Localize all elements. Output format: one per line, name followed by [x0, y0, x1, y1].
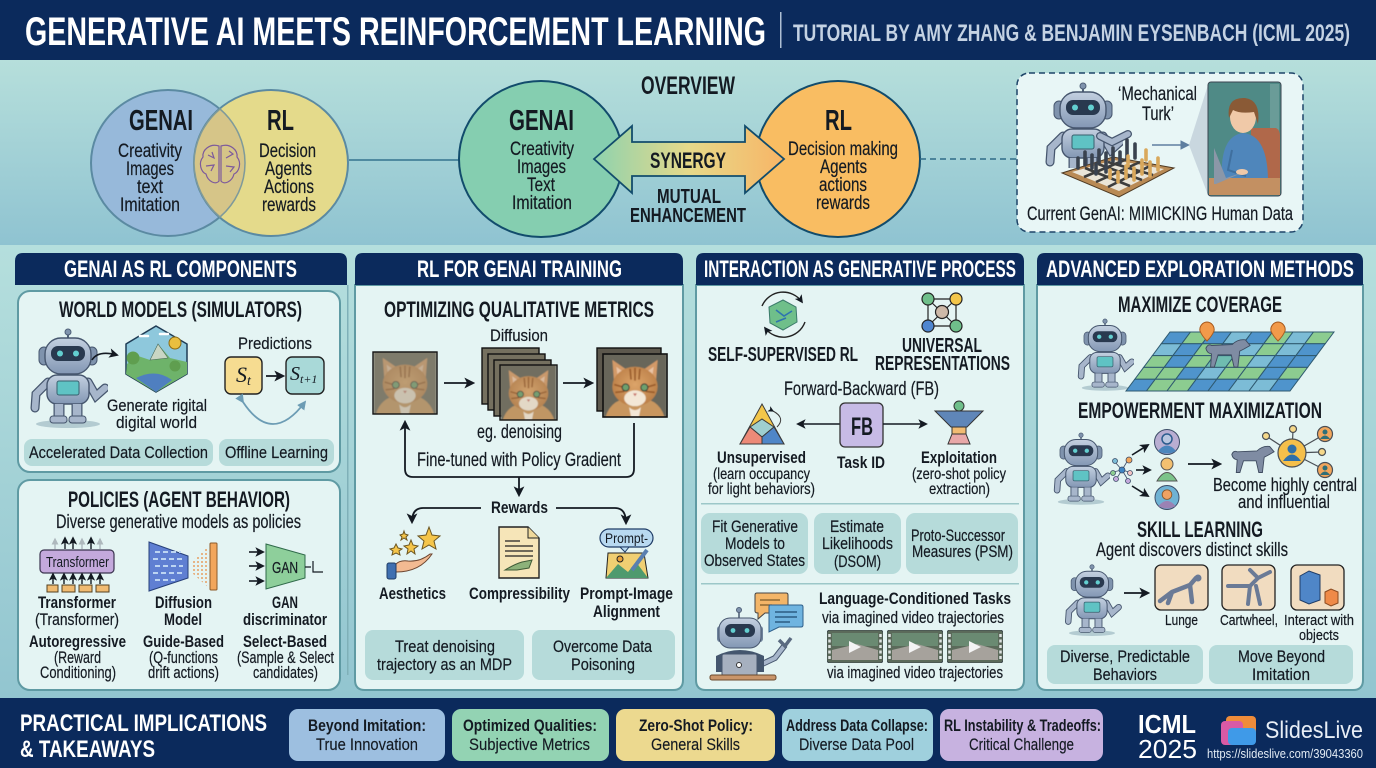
takeaway: optimized qualities: Subjective Metrics	[469, 735, 590, 754]
arrow: noisy to denoising	[444, 382, 473, 384]
icon: diffusion model	[149, 542, 217, 591]
world caption	[107, 396, 207, 432]
label: lunge: Lunge	[1165, 612, 1198, 629]
pill: proto-successor measures	[906, 513, 1018, 574]
icon: person bottom	[1155, 485, 1179, 510]
label: interact with objects	[1284, 612, 1354, 644]
arrow: robot to world	[92, 353, 117, 360]
coverage grid	[1126, 332, 1334, 391]
circle: GenAI: Imitation	[512, 193, 572, 214]
venn diagram: GenAI and RL overlap	[91, 90, 348, 236]
icon: self-supervised cycle	[762, 292, 805, 337]
pill: offline learning: Offline Learning	[225, 443, 328, 462]
denoising label: eg. denoising	[477, 422, 562, 443]
icon: person top	[1154, 430, 1180, 454]
icon: robot playing chess	[1050, 83, 1174, 197]
arrow: denoising to clean	[563, 382, 592, 384]
pill: estimate likelihoods	[814, 513, 901, 574]
label: aesthetics: Aesthetics	[379, 584, 446, 603]
column: diffusion text: Guide-Based	[143, 632, 224, 651]
state box: S_t: t	[247, 374, 252, 389]
arrow: to rewards	[518, 477, 520, 495]
connector: dashed line to callout	[920, 158, 1017, 160]
icon: GAN	[249, 544, 323, 589]
label: cartwheel: Cartwheel,	[1220, 612, 1278, 629]
icon: location pin left	[1200, 322, 1214, 341]
icon: person at laptop	[1208, 82, 1281, 196]
panel heading: INTERACTION AS GENERATIVE PROCESS	[704, 256, 1016, 283]
icon: running robot	[1068, 565, 1119, 636]
arrow: policy gradient feedback	[405, 422, 634, 477]
takeaway: RL instability: RL Instability & Tradeoffs:	[944, 716, 1101, 735]
panel: RL for GenAI training	[355, 253, 683, 690]
policy gradient label: Fine-tuned with Policy Gradient	[417, 450, 622, 471]
column: diffusion text: (Q-functions	[149, 648, 218, 667]
mechanical turk label: ‘Mechanical	[1118, 84, 1197, 105]
RL traits: Agents	[265, 159, 312, 180]
circle: GenAI	[459, 81, 623, 237]
label: forward-backward: Forward-Backward (FB)	[784, 379, 939, 400]
panel: advanced exploration methods	[1037, 253, 1363, 690]
GenAI traits: Creativity	[118, 141, 182, 162]
state box: S_t+1: S	[290, 363, 300, 385]
icon: SlidesLive logo	[1221, 716, 1256, 745]
takeaway: optimized qualities	[452, 709, 609, 761]
arrow: state transition	[266, 375, 283, 377]
arrow: rewards to aesthetics	[412, 508, 481, 522]
ICML 2025 logo text	[1138, 709, 1197, 764]
pill: treat denoising as MDP: trajectory as an MDP	[377, 655, 512, 674]
predictions label: Predictions	[238, 334, 312, 353]
label: prompt-image alignment: Prompt-Image	[580, 584, 673, 603]
label: universal representations	[875, 335, 1010, 375]
main content background	[0, 245, 1376, 700]
pill: fit generative models: Observed States	[704, 551, 805, 570]
column: diffusion text	[143, 593, 224, 682]
ICML 2025 logo text: ICML	[1138, 709, 1196, 739]
card: policies	[18, 480, 340, 690]
label: exploitation: Exploitation	[921, 448, 997, 467]
column: transformer text: Transformer	[38, 593, 116, 612]
icon: robot	[1081, 319, 1132, 391]
overview heading: OVERVIEW	[641, 72, 735, 100]
icon: hexagon world	[126, 326, 187, 392]
icon: location pin right	[1271, 322, 1285, 341]
footer heading: & TAKEAWAYS	[20, 736, 155, 763]
rewards label: Rewards	[491, 498, 548, 517]
takeaway: beyond imitation: True Innovation	[316, 735, 418, 754]
column: GAN text	[237, 593, 334, 682]
label: self-supervised RL: SELF-SUPERVISED RL	[708, 344, 858, 366]
panel heading: RL FOR GENAI TRAINING	[417, 256, 622, 283]
column: diffusion text: Diffusion	[155, 593, 212, 612]
image: noisy cat	[373, 352, 437, 414]
card subheading: Diverse generative models as policies	[56, 512, 301, 533]
takeaway: beyond imitation	[289, 709, 445, 761]
state box: S_t: S	[236, 362, 247, 387]
icon: cartwheel skill	[1222, 565, 1275, 610]
label: interact with objects: Interact with	[1284, 612, 1354, 629]
RL traits: Decision	[259, 141, 316, 162]
pill: accelerated data collection: Accelerated Data Collection	[29, 443, 208, 462]
label: central and influential	[1213, 475, 1357, 512]
pill: estimate likelihoods: Likelihoods	[822, 534, 893, 553]
GenAI traits: text	[137, 177, 164, 198]
section heading: maximize coverage: MAXIMIZE COVERAGE	[1118, 292, 1282, 317]
icon: robot dog	[1232, 446, 1274, 472]
circle: RL: Decision making	[788, 139, 898, 160]
RL traits	[259, 141, 316, 216]
circle: GenAI: Text	[527, 175, 556, 196]
section heading: skill learning: SKILL LEARNING	[1137, 517, 1263, 542]
circle: GenAI: Images	[517, 157, 566, 178]
video caption: via imagined video trajectories	[827, 663, 1003, 682]
pill: overcome data poisoning	[532, 630, 675, 680]
pill: treat denoising as MDP	[365, 630, 524, 680]
icon: robot	[35, 329, 105, 428]
column: transformer text: Conditioning)	[40, 663, 116, 682]
takeaway: RL instability: Critical Challenge	[969, 735, 1074, 754]
takeaway: beyond imitation: Beyond Imitation:	[308, 716, 426, 735]
card heading: WORLD MODELS (SIMULATORS)	[59, 297, 302, 322]
world caption: Generate rigital	[107, 396, 207, 415]
icon: prompt and picture	[600, 529, 653, 578]
icon: robot dog	[1206, 340, 1250, 367]
takeaway: zero-shot policy	[616, 709, 775, 761]
header bar	[0, 0, 1376, 60]
image stack: denoising	[482, 348, 557, 420]
takeaway: RL instability	[940, 709, 1103, 761]
label: unsupervised	[708, 448, 815, 498]
icon: interact with objects	[1291, 565, 1344, 610]
takeaway: address data collapse: Diverse Data Pool	[799, 735, 914, 754]
icon: robot with laptop and chat bubbles	[710, 593, 803, 680]
light cone	[1189, 85, 1208, 195]
state box: S_t+1: t+1	[300, 372, 317, 386]
label: prompt-image alignment	[580, 584, 673, 621]
icon: prompt and picture: Prompt-	[605, 530, 648, 546]
state box: S_t+1	[286, 357, 324, 394]
panel heading	[15, 253, 347, 285]
panel heading	[355, 253, 683, 285]
arrow: FB to exploitation	[883, 423, 926, 425]
RL traits: rewards	[262, 195, 316, 216]
GenAI traits	[118, 141, 182, 216]
takeaway: zero-shot policy: General Skills	[651, 735, 740, 754]
label: exploitation: extraction)	[929, 481, 990, 498]
mutual enhancement label	[630, 186, 746, 227]
pill: estimate likelihoods: Estimate	[830, 517, 884, 536]
footer heading: PRACTICAL IMPLICATIONS	[20, 710, 267, 737]
takeaway: address data collapse: Address Data Collapse:	[786, 716, 928, 735]
pill: offline learning	[219, 439, 334, 466]
arrow: robot to human	[1152, 144, 1188, 146]
label: universal representations: REPRESENTATIONS	[875, 353, 1010, 375]
section heading: OPTIMIZING QUALITATIVE METRICS	[384, 297, 654, 322]
label: unsupervised: (learn occupancy	[713, 466, 810, 483]
pill: fit generative models	[701, 513, 808, 574]
overview background band	[0, 60, 1376, 245]
icon: central hub network	[1262, 426, 1332, 478]
ICML 2025 logo text: 2025	[1138, 734, 1197, 764]
pill: accelerated data collection	[24, 439, 213, 466]
arrow: FB to unsupervised	[798, 423, 840, 425]
pill: diverse predictable behaviors	[1047, 645, 1203, 684]
image: clean cat	[597, 348, 667, 417]
SlidesLive wordmark: SlidesLive	[1265, 717, 1363, 744]
pill: fit generative models: Models to	[725, 534, 785, 553]
icon: action network	[1110, 457, 1132, 484]
column: GAN text: candidates)	[253, 663, 318, 682]
takeaway: zero-shot policy: Zero-Shot Policy:	[639, 716, 753, 735]
panel heading	[696, 253, 1024, 285]
column: GAN text: discriminator	[243, 610, 327, 629]
footer heading	[20, 710, 267, 763]
circle: RL: actions	[819, 175, 867, 196]
column: diffusion text: Model	[164, 610, 202, 629]
column: GAN text: GAN	[272, 593, 298, 612]
icon: robot	[1057, 433, 1108, 505]
panel heading: GENAI AS RL COMPONENTS	[64, 256, 297, 283]
icon: triangle occupancy	[740, 404, 784, 444]
mutual enhancement label: ENHANCEMENT	[630, 205, 746, 227]
panel: GenAI as RL components	[15, 253, 348, 690]
column: GAN text: Select-Based	[243, 632, 327, 651]
box: FB: FB	[851, 413, 873, 441]
label: unsupervised: Unsupervised	[717, 448, 806, 467]
mutual enhancement label: MUTUAL	[657, 186, 721, 208]
column: transformer text: Autoregressive	[29, 632, 126, 651]
panel: interaction as generative process	[696, 253, 1024, 690]
pill: treat denoising as MDP: Treat denoising	[395, 637, 495, 656]
card heading: POLICIES (AGENT BEHAVIOR)	[68, 487, 290, 512]
pill: proto-successor measures: Proto-Successor	[911, 526, 1005, 545]
icon: document	[499, 527, 539, 578]
arrow: to skills	[1124, 592, 1148, 594]
arrow: rewards to alignment	[556, 508, 626, 523]
caption: Current GenAI: MIMICKING Human Data	[1027, 204, 1293, 225]
takeaway: optimized qualities: Optimized Qualities:	[463, 716, 597, 735]
venn label: GenAI: GENAI	[129, 105, 193, 137]
card: world models	[18, 291, 340, 472]
connector: venn to synergy	[349, 159, 461, 161]
label: exploitation	[912, 448, 1006, 498]
label: task ID: Task ID	[837, 453, 885, 472]
label: universal representations: UNIVERSAL	[902, 335, 982, 357]
pill: diverse predictable behaviors: Behaviors	[1093, 665, 1157, 684]
GenAI traits: Imitation	[120, 195, 180, 216]
icon: person middle	[1157, 458, 1177, 481]
icon: brain	[200, 145, 240, 183]
takeaway: address data collapse	[782, 709, 933, 761]
mechanical turk label	[1118, 84, 1197, 125]
title: GENERATIVE AI MEETS REINFORCEMENT LEARNING	[25, 10, 766, 54]
RL traits: Actions	[264, 177, 314, 198]
pill: move beyond imitation: Imitation	[1252, 665, 1310, 684]
venn label: RL: RL	[267, 105, 294, 137]
label: central and influential: and influential	[1238, 492, 1330, 512]
box: FB	[840, 403, 883, 447]
arrow: to central	[1188, 463, 1220, 465]
circle: RL	[756, 81, 920, 237]
arrow: synergy double arrow	[594, 126, 784, 193]
label: compressibility: Compressibility	[469, 584, 570, 603]
diffusion label: Diffusion	[490, 326, 548, 345]
label: prompt-image alignment: Alignment	[593, 602, 660, 621]
icon: GAN: GAN	[272, 560, 298, 577]
pill: diverse predictable behaviors: Diverse, Predictable	[1060, 647, 1190, 666]
circle: GenAI: Creativity	[510, 139, 574, 160]
label: language-conditioned tasks: Language-Conditioned Tasks	[819, 589, 1011, 608]
synergy label: SYNERGY	[650, 148, 726, 173]
pill: estimate likelihoods: (DSOM)	[834, 552, 881, 571]
label: interact with objects: objects	[1299, 627, 1339, 644]
circle: RL: rewards	[816, 193, 870, 214]
pill: move beyond imitation	[1209, 645, 1353, 684]
pill: overcome data poisoning: Overcome Data	[553, 637, 652, 656]
world caption: digital world	[116, 413, 197, 432]
icon: funnel	[935, 401, 983, 444]
state box: S_t	[225, 357, 262, 394]
icon: universal representation graph	[922, 293, 962, 332]
callout: mechanical turk	[1017, 73, 1303, 232]
column: diffusion text: drift actions)	[148, 663, 219, 682]
column: transformer text: (Reward	[54, 648, 101, 667]
icon: stars in hand	[387, 527, 440, 579]
column: GAN text: (Sample & Select	[237, 648, 334, 667]
arrow: feedback loop	[243, 402, 305, 424]
label: exploitation: (zero-shot policy	[912, 466, 1006, 483]
mechanical turk label: Turk’	[1142, 104, 1174, 125]
icon: transformer: Transformer	[46, 554, 109, 571]
arrows: robot options	[1132, 445, 1150, 496]
icon: lunge skill	[1155, 565, 1208, 610]
GenAI traits: Images	[126, 159, 174, 180]
column: transformer text	[29, 593, 126, 682]
label: unsupervised: for light behaviors)	[708, 481, 815, 498]
subheading: agent discovers skills: Agent discovers distinct skills	[1096, 540, 1288, 561]
video thumbnails	[827, 630, 1003, 663]
pill: overcome data poisoning: Poisoning	[571, 655, 635, 674]
circle: RL: RL	[825, 105, 852, 137]
pill: move beyond imitation: Move Beyond	[1238, 647, 1325, 666]
icon: transformer	[40, 538, 114, 592]
label: via imagined video trajectories: via imagined video trajectories	[822, 608, 1004, 627]
circle: RL: Agents	[820, 157, 867, 178]
pill: proto-successor measures: Measures (PSM)	[912, 542, 1013, 561]
column: transformer text: (Transformer)	[35, 610, 119, 629]
pill: fit generative models: Fit Generative	[712, 517, 798, 536]
circle: GenAI: GENAI	[509, 105, 574, 137]
footer bar	[0, 698, 1376, 768]
